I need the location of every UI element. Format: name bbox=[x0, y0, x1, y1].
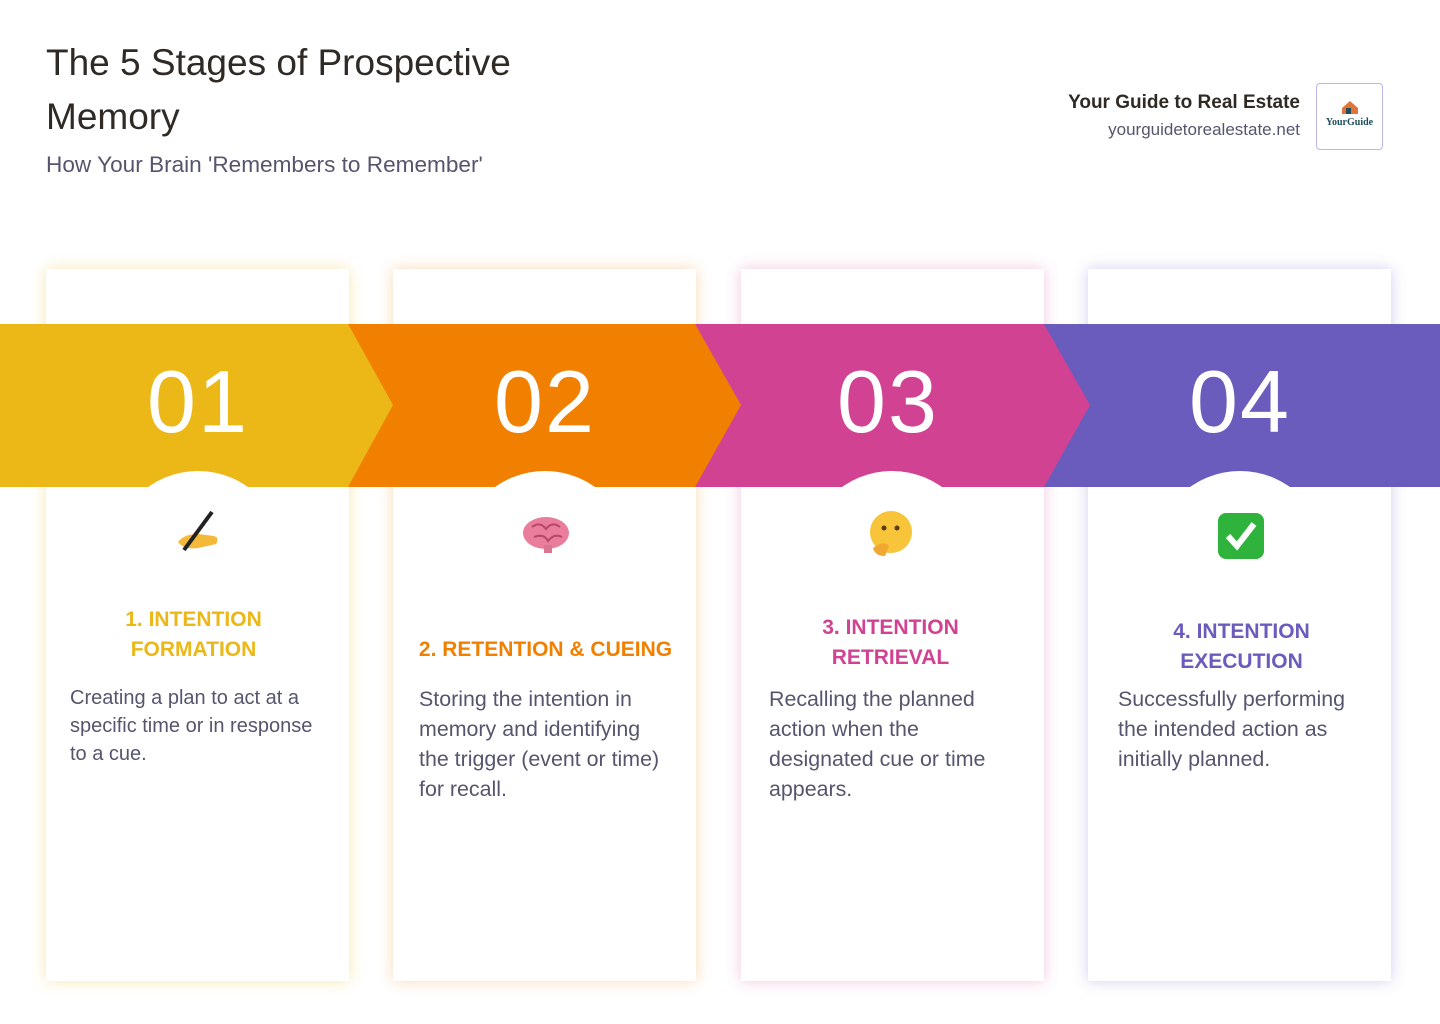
number 01: 01 bbox=[147, 352, 249, 451]
icon: check mark bbox=[1218, 513, 1264, 559]
brand url: yourguidetorealestate.net bbox=[1108, 120, 1300, 139]
card 2 body: the trigger (event or time) bbox=[419, 747, 659, 771]
card 2 body: memory and identifying bbox=[419, 717, 640, 741]
title: The 5 Stages of Prospective bbox=[46, 42, 511, 83]
card 2 body: Storing the intention in bbox=[419, 687, 632, 711]
card 3 body bbox=[769, 687, 985, 801]
card 3 bbox=[741, 269, 1044, 981]
card 2 bbox=[393, 269, 696, 981]
card 4 body: Successfully performing bbox=[1118, 687, 1345, 711]
card 4 title: 4. INTENTION bbox=[1173, 620, 1310, 643]
icon: writing hand bbox=[178, 510, 218, 552]
number 04: 04 bbox=[1189, 352, 1291, 451]
card 1 body bbox=[70, 687, 312, 765]
card 3 body: appears. bbox=[769, 777, 852, 801]
card 1 title bbox=[125, 608, 262, 661]
logo bbox=[1316, 83, 1383, 150]
card 4 body: initially planned. bbox=[1118, 747, 1270, 771]
icon: brain bbox=[523, 517, 569, 553]
logo: YourGuide bbox=[1326, 117, 1373, 128]
card 3 title: 3. INTENTION bbox=[822, 616, 959, 639]
card 1 body: specific time or in response bbox=[70, 715, 312, 737]
card 1 title: FORMATION bbox=[131, 638, 256, 661]
card 1 title: 1. INTENTION bbox=[125, 608, 262, 631]
card 2 body bbox=[419, 687, 659, 801]
card 4 body: the intended action as bbox=[1118, 717, 1327, 741]
card 1 body: to a cue. bbox=[70, 743, 147, 765]
chevron banner bbox=[0, 324, 1440, 487]
title bbox=[46, 42, 511, 137]
card 4 title bbox=[1173, 620, 1310, 673]
number 02: 02 bbox=[494, 352, 596, 451]
card 4 bbox=[1088, 269, 1391, 981]
card 4 title: EXECUTION bbox=[1180, 650, 1303, 673]
card 1 body: Creating a plan to act at a bbox=[70, 687, 299, 709]
brand block bbox=[1068, 83, 1383, 150]
title: Memory bbox=[46, 96, 180, 137]
card 3 body: Recalling the planned bbox=[769, 687, 975, 711]
brand name: Your Guide to Real Estate bbox=[1068, 92, 1300, 113]
card 3 title bbox=[822, 616, 959, 669]
card 3 body: action when the bbox=[769, 717, 919, 741]
icon: thinking face bbox=[870, 511, 912, 556]
card 3 body: designated cue or time bbox=[769, 747, 985, 771]
card 2 title: 2. RETENTION & CUEING bbox=[419, 638, 672, 661]
card 4 body bbox=[1118, 687, 1345, 771]
card 3 title: RETRIEVAL bbox=[832, 646, 949, 669]
subtitle: How Your Brain 'Remembers to Remember' bbox=[46, 152, 483, 177]
number 03: 03 bbox=[837, 352, 939, 451]
card 2 body: for recall. bbox=[419, 777, 507, 801]
card 1 bbox=[46, 269, 349, 981]
